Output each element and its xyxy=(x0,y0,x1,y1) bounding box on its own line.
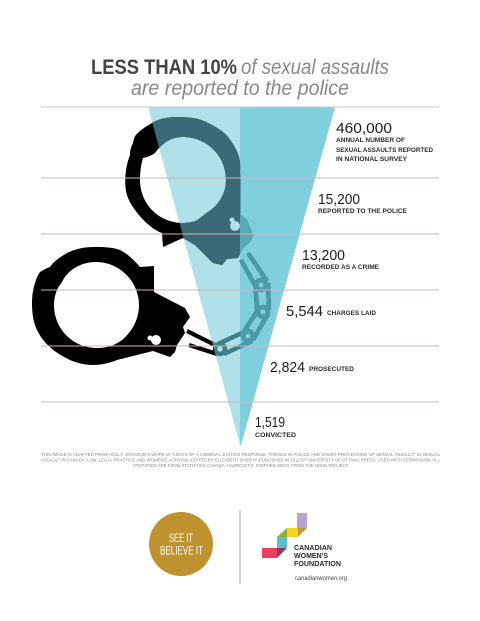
title: are reported to the police xyxy=(131,77,349,100)
stat: 2,824 xyxy=(270,360,354,376)
level lines xyxy=(41,107,439,402)
logo wordmark: FOUNDATION xyxy=(294,559,341,568)
stat: 2,824: PROSECUTED xyxy=(309,366,354,373)
source note: STATISTICS ARE FROM STATISTICS CANADA. HANDCUFFS: STEPHEN WEST, FROM THE NOUN PROJECT. xyxy=(133,463,349,468)
stat: 15,200: 15,200 xyxy=(318,192,360,208)
icon: logo mark xyxy=(262,513,307,558)
stat: 5,544 xyxy=(286,304,376,320)
foundation logo xyxy=(262,513,347,582)
badge: see it believe it xyxy=(149,512,213,576)
badge: see it believe it: SEE IT xyxy=(169,531,193,545)
source note: THIS IMAGE IS ADAPTED FROM HOLLY JOHNSON'S WORK IN "LIMITS OF A CRIMINAL JUSTICE RESPONSE: TRENDS IN POLICE AND COURT PROCESSING OF SEXUAL ASSAULT" IN SEXUAL xyxy=(41,452,441,457)
stat: 460,000: 460,000 xyxy=(336,121,392,137)
logo url: canadianwomen.org xyxy=(295,575,347,582)
stat: 13,200: 13,200 xyxy=(302,248,345,264)
title: LESS THAN 10% xyxy=(91,56,237,79)
title: of sexual assaults xyxy=(241,56,389,79)
source note: ASSAULT IN CANADA: LAW, LEGAL PRACTICE AND WOMEN'S ACTIVISM, EDITED BY ELIZABETH SHEEHY. PUBLISHED IN 2012 BY UNIVERSITY OF OTTAWA PRESS. USED WITH PERMISSION. ALL xyxy=(41,458,441,462)
stat: 13,200 xyxy=(302,248,380,271)
logo wordmark: WOMEN'S xyxy=(294,551,328,560)
logo wordmark xyxy=(294,543,341,568)
handcuffs illustration xyxy=(32,117,269,365)
stat: 460,000 xyxy=(336,121,433,163)
stat: 13,200: RECORDED AS A CRIME xyxy=(302,264,380,271)
badge: see it believe it: BELIEVE IT xyxy=(160,544,203,558)
stat: 15,200 xyxy=(318,192,408,215)
stat: 1,519: CONVICTED xyxy=(255,432,296,439)
stat: 5,544: 5,544 xyxy=(286,304,323,320)
funnel triangle xyxy=(148,107,335,445)
source note xyxy=(41,452,441,468)
stat: 460,000: ANNUAL NUMBER OF xyxy=(336,137,405,144)
title xyxy=(91,56,389,100)
stat: 460,000: SEXUAL ASSAULTS REPORTED xyxy=(336,147,433,154)
stat: 1,519: 1,519 xyxy=(255,415,285,431)
stat: 1,519 xyxy=(255,415,296,439)
stat: 2,824: 2,824 xyxy=(270,360,305,376)
stat: 15,200: REPORTED TO THE POLICE xyxy=(318,208,408,215)
stat: 5,544: CHARGES LAID xyxy=(327,310,376,317)
logo wordmark: CANADIAN xyxy=(294,543,332,552)
stat: 460,000: IN NATIONAL SURVEY xyxy=(336,156,408,163)
